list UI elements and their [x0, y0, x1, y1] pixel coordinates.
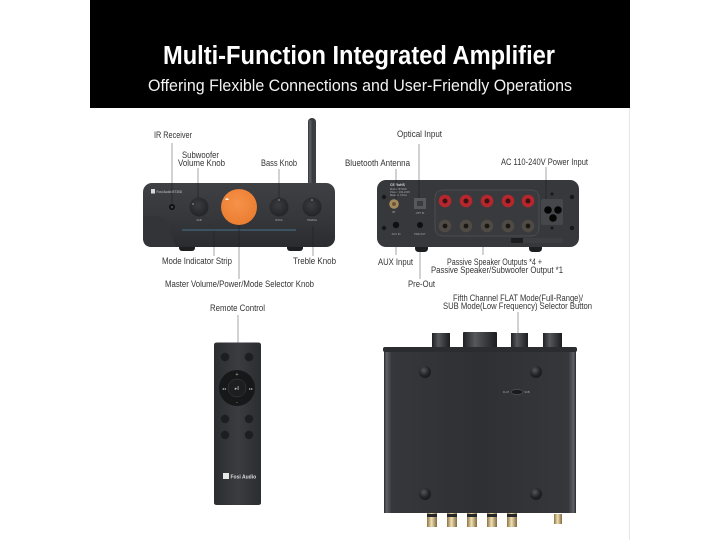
callout: Bluetooth Antenna: Bluetooth Antenna: [345, 158, 410, 168]
FLAT/SUB selector switch: SUB: [524, 390, 530, 394]
callout: Fifth Channel selector: SUB Mode(Low Frequency) Selector Button: [443, 301, 592, 311]
optical input: [414, 198, 426, 215]
callout: Passive Speaker Outputs: Passive Speaker/Subwoofer Output *1: [431, 265, 563, 275]
treble knob: [302, 198, 322, 222]
callout: Optical Input: [397, 129, 442, 198]
top knobs: [432, 332, 562, 348]
callout: Optical Input: Optical Input: [397, 129, 442, 139]
panel: front view of amplifier: [143, 118, 335, 251]
navigation wheel: [219, 370, 255, 406]
right edge hairline: [628, 108, 630, 540]
amplifier body: [143, 183, 335, 247]
callout: Pre-Out: Pre-Out: [408, 279, 435, 289]
bluetooth antenna connector: BT: [392, 210, 396, 214]
remote body: [214, 342, 261, 505]
callout: Bass Knob: [261, 158, 297, 198]
callout: Passive Speaker Outputs: [431, 247, 563, 275]
power and mode buttons: [221, 353, 253, 361]
callout: Bass Knob: Bass Knob: [261, 158, 297, 168]
callout: Fifth Channel selector: Fifth Channel FLAT Mode(Full-Range)/: [453, 293, 583, 303]
AUX input: [392, 222, 400, 236]
navigation wheel: ▸▸: [249, 386, 253, 391]
connector collars: [427, 514, 517, 517]
callout: Pre-Out: [408, 252, 435, 289]
callout: Master Knob: Master Volume/Power/Mode Selector Knob: [165, 279, 314, 289]
function buttons: [221, 415, 253, 439]
optical input: OPT IN: [416, 211, 424, 215]
certification text: CE RoHS: [390, 183, 406, 187]
callout: Bluetooth Antenna: [345, 158, 410, 199]
screws: [382, 192, 574, 230]
red speaker terminals: [439, 195, 534, 207]
callout: Treble Knob: [293, 226, 336, 266]
treble knob: TREBLE: [307, 218, 317, 222]
callout: Fifth Channel selector: [443, 293, 592, 334]
subwoofer knob: [190, 198, 208, 222]
subwoofer knob: SUB: [196, 218, 202, 222]
callout: AUX Input: [378, 247, 413, 267]
speaker terminal frame: [435, 190, 539, 236]
callout: Passive Speaker Outputs: Passive Speaker Outputs *4 +: [447, 257, 542, 267]
callout: AC Power Input: [501, 157, 588, 199]
IR receiver: [169, 204, 175, 210]
certification text: Power: 100-240V: [390, 190, 410, 194]
certification text: Made in China: [390, 193, 407, 197]
brand logo: Fosi Audio BT30D: [156, 190, 183, 194]
header banner: [90, 0, 630, 108]
black speaker terminals: [439, 220, 534, 232]
bottom connectors: [427, 513, 562, 527]
top flange: [383, 347, 577, 352]
bass knob: [270, 198, 288, 222]
navigation wheel: ▸‖: [235, 386, 239, 392]
brand logo: [151, 189, 183, 194]
bluetooth antenna connector: [389, 199, 399, 214]
rating label: [511, 238, 563, 243]
callout: Remote Control: [210, 303, 265, 343]
callout: Subwoofer Volume Knob: Volume Knob: [178, 158, 225, 168]
callout: Treble Knob: Treble Knob: [293, 256, 336, 266]
callout: IR Receiver: [154, 130, 192, 203]
panel: remote control: [214, 342, 261, 505]
remote brand logo: [223, 473, 256, 480]
certification text: [390, 183, 410, 197]
title: Multi-Function Integrated Amplifier: [163, 42, 555, 70]
FLAT/SUB selector switch: FLAT: [503, 390, 509, 394]
master knob: [221, 189, 257, 225]
navigation wheel: -: [236, 400, 238, 406]
certification text: Model: BT30D: [390, 187, 407, 191]
panel: rear view of amplifier: [377, 180, 579, 252]
FLAT/SUB selector switch: [503, 389, 530, 395]
callout: Remote Control: Remote Control: [210, 303, 265, 313]
AC power socket: [541, 199, 563, 225]
callout: Mode Indicator Strip: [162, 231, 232, 266]
callout: Subwoofer Volume Knob: Subwoofer: [182, 150, 219, 160]
chassis: [384, 350, 576, 513]
rubber feet: [179, 244, 303, 251]
callout: IR Receiver: IR Receiver: [154, 130, 192, 140]
remote brand logo: Fosi Audio: [230, 474, 256, 480]
rubber feet: [415, 244, 542, 252]
callout: Subwoofer Volume Knob: [178, 150, 225, 198]
navigation wheel: +: [236, 372, 239, 378]
callout: Mode Indicator Strip: Mode Indicator Strip: [162, 256, 232, 266]
AUX input: AUX IN: [392, 232, 400, 236]
callout: AUX Input: AUX Input: [378, 257, 413, 267]
rubber feet: [419, 366, 542, 500]
pre-out: [414, 222, 426, 236]
subtitle: Offering Flexible Connections and User-Friendly Operations: [148, 76, 572, 95]
callout: AC Power Input: AC 110-240V Power Input: [501, 157, 588, 167]
navigation wheel: ◂◂: [222, 386, 226, 391]
antenna: [308, 118, 316, 186]
mode indicator strip: [182, 230, 296, 231]
panel: bottom view of amplifier: [383, 332, 577, 527]
amplifier rear body: [377, 180, 579, 247]
bass knob: BASS: [276, 218, 283, 222]
pre-out: PRE OUT: [414, 232, 426, 236]
